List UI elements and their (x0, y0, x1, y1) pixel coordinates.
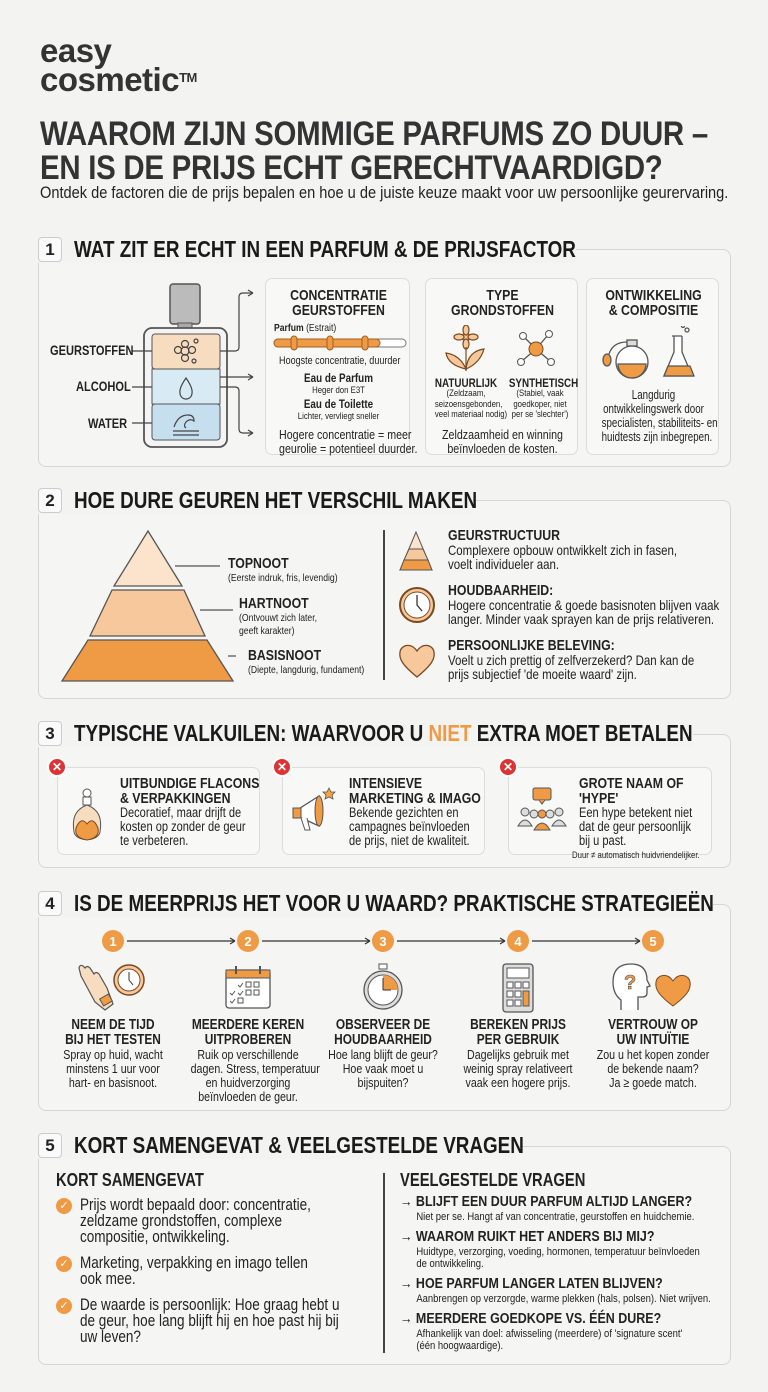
card: ontwikkeling: Langdurig (632, 388, 675, 402)
label: basisnoot: BASISNOOT (248, 647, 321, 664)
heading: section 2: 2 (45, 490, 55, 510)
card: type grondstoffen: seizoensgebonden, (435, 398, 502, 410)
step 2: en huidverzorging (206, 1075, 290, 1090)
item: houdbaarheid: HOUDBAARHEID: (448, 582, 553, 599)
step arrows: 1 (109, 934, 117, 949)
heading: section 4: IS DE MEERPRIJS HET VOOR U WAARD? PRAKTISCHE STRATEGIEËN (74, 890, 714, 916)
faq list: Aanbrengen op verzorgde, warme plekken (hals, polsen). Niet wrijven. (416, 1293, 711, 1305)
card: concentratie: Hogere concentratie = meer (279, 427, 411, 442)
card: marketing: MARKETING & IMAGO (349, 790, 481, 807)
card: marketing: Bekende gezichten en (349, 805, 459, 820)
label: hartnoot (239, 595, 317, 636)
card: type grondstoffen: goedkoper, niet (513, 398, 567, 410)
step 5: de bekende naam? (607, 1061, 699, 1076)
card: ontwikkeling: ontwikkelingswerk door (603, 402, 704, 416)
step 1 (63, 964, 163, 1090)
step 3: HOUDBAARHEID (334, 1032, 432, 1048)
label: hartnoot: HARTNOOT (239, 595, 309, 612)
title: WAAROM ZIJN SOMMIGE PARFUMS ZO DUUR – (40, 115, 708, 153)
step 4: weinig spray relativeert (463, 1061, 573, 1076)
label: topnoot: (Eerste indruk, fris, levendig) (228, 572, 338, 584)
bullet 1: zeldzame grondstoffen, complexe (80, 1212, 282, 1230)
bullet 3: de geur, hoe lang blijft hij en hoe past hij bij (80, 1312, 339, 1330)
icon: x badge 1 (47, 757, 67, 777)
card: type grondstoffen: TYPE (486, 287, 519, 304)
title (40, 115, 708, 187)
item: geurstructuur (399, 527, 677, 572)
label: hartnoot: geeft karakter) (239, 624, 295, 636)
bullet 3: De waarde is persoonlijk: Hoe graag hebt u (80, 1296, 339, 1314)
label: basisnoot: (Diepte, langdurig, fundament) (248, 664, 364, 676)
bullet 1: ✓ (59, 1200, 69, 1212)
card: type grondstoffen: (Stabiel, vaak (516, 388, 564, 399)
faq list: → WAAROM RUIKT HET ANDERS BIJ MIJ? (400, 1229, 654, 1245)
icon: calendar (225, 966, 271, 1009)
label: topnoot (228, 555, 338, 584)
card: marketing: campagnes beïnvloeden (349, 819, 470, 834)
card: type grondstoffen: per se 'slechter') (512, 409, 568, 420)
heading: section 5: KORT SAMENGEVAT & VEELGESTELDE VRAGEN (74, 1132, 524, 1158)
step 2: Ruik op verschillende (197, 1047, 299, 1062)
bullet 2: ✓ (59, 1258, 69, 1270)
bullet 2 (56, 1254, 308, 1288)
step 5: VERTROUW OP (608, 1017, 698, 1033)
summary list (56, 1170, 339, 1346)
faq list: Afhankelijk van doel: afwisseling (meerdere) of 'signature scent' (416, 1328, 682, 1340)
bottle diagram (132, 283, 254, 448)
card: ontwikkeling: ONTWIKKELING (605, 287, 702, 304)
label: alcohol: ALCOHOL (76, 379, 131, 394)
card: flacons (57, 767, 260, 855)
icon: head and heart (612, 963, 691, 1010)
card: marketing (282, 767, 485, 855)
step arrows: 2 (244, 934, 252, 949)
footnote: Duur ≠ automatisch huidvriendelijker. (572, 850, 700, 861)
card: concentratie: Lichter, vervliegt sneller (298, 411, 379, 422)
card: concentratie: CONCENTRATIE (290, 287, 387, 304)
card: type grondstoffen: (Zeldzaam, (447, 388, 485, 399)
icon: x badge 1: ✕ (52, 760, 62, 774)
step 5: Ja ≥ goede match. (609, 1075, 697, 1090)
bullet 1: compositie, ontwikkeling. (80, 1228, 230, 1246)
step 1: hart- en basisnoot. (69, 1075, 157, 1090)
bullet 1: Prijs wordt bepaald door: concentratie, (80, 1196, 311, 1214)
card: concentratie: Parfum (Estrait) (274, 322, 336, 334)
panel: section 3 (38, 734, 731, 868)
icon: x badge 3 (498, 757, 518, 777)
item: persoonlijke beleving: PERSOONLIJKE BELEVING: (448, 637, 615, 654)
card: ontwikkeling: specialisten, stabiliteits- en (602, 416, 718, 430)
card: concentratie: Heger don E3T (312, 385, 365, 396)
faq list: → HOE PARFUM LANGER LATEN BLIJVEN? (400, 1276, 663, 1292)
faq list (400, 1170, 711, 1352)
bullet 1 (56, 1196, 311, 1246)
item: geurstructuur: GEURSTRUCTUUR (448, 527, 560, 544)
step 2: MEERDERE KEREN (192, 1017, 304, 1033)
heading: section 3: 3 (45, 724, 55, 742)
card: concentratie (265, 278, 410, 455)
card: type grondstoffen: SYNTHETISCH (509, 376, 578, 390)
item: persoonlijke beleving: Voelt u zich prettig of zelfverzekerd? Dan kan de (448, 652, 694, 668)
logo: cosmeticTM (40, 61, 197, 98)
step 3 (328, 964, 438, 1090)
summary list: KORT SAMENGEVAT (56, 1170, 204, 1190)
logo: easy (40, 32, 111, 69)
card: hype (508, 767, 712, 855)
step 5: Zou u het kopen zonder (597, 1047, 709, 1062)
icon: hand and clock (78, 964, 145, 1011)
step 3: bijspuiten? (358, 1075, 408, 1090)
step 4 (463, 963, 573, 1090)
heading: section 3: TYPISCHE VALKUILEN: WAARVOOR U NIET EXTRA MOET BETALEN (74, 720, 693, 746)
card: ontwikkeling (586, 278, 719, 455)
icon: calculator (502, 963, 534, 1013)
label: water: WATER (88, 416, 127, 431)
step 4: BEREKEN PRIJS (470, 1017, 566, 1033)
step 3: OBSERVEER DE (336, 1017, 430, 1033)
step 1: minstens 1 uur voor (66, 1061, 160, 1076)
icon: megaphone (292, 787, 336, 830)
bullet 3 (56, 1296, 339, 1346)
card: concentratie: Hoogste concentratie, duurder (279, 355, 400, 367)
step arrows (102, 930, 664, 952)
icon: head and heart: ? (624, 972, 636, 994)
step 2 (191, 966, 320, 1104)
icon: x badge 3: ✕ (503, 760, 513, 774)
faq list: (één hoogwaardige). (416, 1340, 503, 1352)
card: hype: GROTE NAAM OF (579, 775, 684, 792)
divider (383, 530, 384, 680)
icon: heart (399, 644, 435, 678)
card: type grondstoffen: GRONDSTOFFEN (451, 302, 554, 319)
card: hype: Een hype betekent niet (579, 805, 692, 820)
step 1: NEEM DE TIJD (71, 1017, 155, 1033)
icon: clock (399, 587, 435, 623)
step arrows: 3 (379, 934, 387, 949)
item: persoonlijke beleving: prijs subjectief 'de moeite waard' zijn. (448, 666, 637, 682)
icon: x badge 2: ✕ (277, 760, 287, 774)
item: geurstructuur: voelt individueler aan. (448, 556, 559, 572)
faq list: → BLIJFT EEN DUUR PARFUM ALTIJD LANGER? (400, 1194, 692, 1210)
card: concentratie: Eau de Parfum (304, 371, 373, 385)
title: EN IS DE PRIJS ECHT GERECHTVAARDIGD? (40, 149, 663, 187)
faq list: Niet per se. Hangt af van concentratie, geurstoffen en huidchemie. (416, 1211, 694, 1223)
bullet 2: ook mee. (80, 1270, 136, 1288)
card: flacons: Decoratief, maar drijft de (120, 805, 241, 820)
step 2: beïnvloeden de geur. (198, 1089, 298, 1104)
bullet 2: Marketing, verpakking en imago tellen (80, 1254, 308, 1272)
card: concentratie: GEURSTOFFEN (292, 302, 385, 319)
card: marketing: INTENSIEVE (349, 775, 422, 792)
step 1: BIJ HET TESTEN (65, 1032, 161, 1048)
bullet 3: ✓ (59, 1300, 69, 1312)
step arrows: 4 (514, 934, 522, 949)
card: concentratie: Eau de Toilette (304, 397, 373, 411)
faq list: Huidtype, verzorging, voeding, hormonen, temperatuur beïnvloeden (416, 1246, 700, 1258)
card: hype: bij u past. (579, 833, 626, 848)
step 4: Dagelijks gebruik met (467, 1047, 569, 1062)
card: ontwikkeling: & COMPOSITIE (609, 302, 698, 319)
panel: section 1 (38, 249, 731, 467)
card: marketing: de prijs, niet de kwaliteit. (349, 833, 470, 848)
divider (383, 1173, 384, 1353)
heading: section 1: 1 (45, 240, 55, 258)
item: houdbaarheid (399, 582, 720, 627)
item: persoonlijke beleving (399, 637, 694, 682)
icon: small pyramid (399, 530, 433, 570)
step 5 (597, 963, 710, 1090)
card: type grondstoffen (425, 278, 578, 455)
heading: section 5: 5 (45, 1136, 55, 1154)
item: geurstructuur: Complexere opbouw ontwikkelt zich in fasen, (448, 542, 677, 558)
icon: crowd with speech bubble (517, 788, 567, 830)
step 3: Hoe lang blijft de geur? (328, 1047, 438, 1062)
subtitle: Ontdek de factoren die de prijs bepalen en hoe u de juiste keuze maakt voor uw persoonlijke geurervaring. (40, 184, 728, 202)
step 4: PER GEBRUIK (477, 1032, 559, 1048)
card: flacons: & VERPAKKINGEN (120, 790, 230, 807)
card: flacons: te verbeteren. (120, 833, 188, 848)
card: type grondstoffen: beïnvloeden de kosten. (447, 441, 558, 456)
faq list: de ontwikkeling. (416, 1258, 484, 1270)
panel: section 5 (38, 1146, 731, 1365)
panel: section 4 (38, 904, 731, 1111)
step 3: Hoe vaak moet u (343, 1061, 423, 1076)
step 4: vaak een hogere prijs. (466, 1075, 570, 1090)
card: ontwikkeling: huidtests zijn inbegrepen. (602, 430, 712, 444)
card: hype: 'HYPE' (579, 790, 618, 807)
step arrows: 5 (649, 934, 657, 949)
pyramid chart (60, 530, 236, 682)
card: hype: dat de geur persoonlijk (579, 819, 691, 834)
heading: section 2: HOE DURE GEUREN HET VERSCHIL MAKEN (74, 487, 477, 513)
step 1: Spray op huid, wacht (63, 1047, 163, 1062)
heading: section 1: WAT ZIT ER ECHT IN EEN PARFUM & DE PRIJSFACTOR (74, 236, 576, 262)
bullet 3: uw leven? (80, 1328, 141, 1346)
card: concentratie: geurolie = potentieel duurder. (279, 441, 417, 456)
item: houdbaarheid: langer. Minder vaak sprayen kan de prijs relativeren. (448, 611, 714, 627)
card: type grondstoffen: veel materiaal nodig) (435, 409, 507, 420)
heading: section 4: 4 (45, 894, 55, 912)
item: houdbaarheid: Hogere concentratie & goede basisnoten blijven vaak (448, 597, 719, 613)
card: flacons: kosten op zonder de geur (120, 819, 246, 834)
label: topnoot: TOPNOOT (228, 555, 289, 572)
faq list: VEELGESTELDE VRAGEN (400, 1170, 585, 1190)
step 2: dagen. Stress, temperatuur (191, 1061, 320, 1076)
card: type grondstoffen: Zeldzaamheid en winning (442, 427, 563, 442)
icon: ornate bottle (72, 788, 102, 840)
step 2: UITPROBEREN (205, 1032, 291, 1048)
logo (40, 32, 197, 98)
step 5: UW INTUÏTIE (617, 1032, 689, 1048)
icon: stopwatch (363, 964, 403, 1010)
label: hartnoot: (Ontvouwt zich later, (239, 612, 317, 624)
card: type grondstoffen: NATUURLIJK (435, 376, 497, 390)
card: flacons: UITBUNDIGE FLACONS (120, 775, 259, 792)
panel: section 2 (38, 500, 731, 699)
faq list: → MEERDERE GOEDKOPE VS. ÉÉN DURE? (400, 1311, 661, 1327)
label: basisnoot (248, 647, 364, 676)
label: geurstoffen: GEURSTOFFEN (50, 343, 133, 358)
icon: x badge 2 (272, 757, 292, 777)
